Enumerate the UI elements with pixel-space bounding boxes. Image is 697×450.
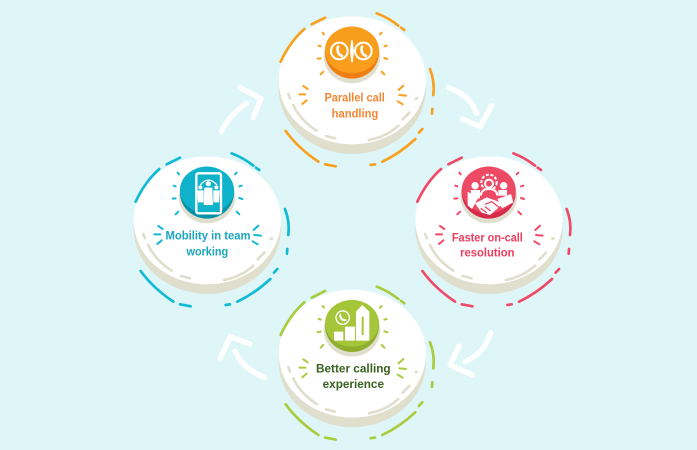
- disc: [279, 16, 426, 154]
- dashed ring: [136, 153, 289, 306]
- label: Better calling: [316, 362, 391, 376]
- arrow: parallel to faster: [448, 88, 492, 127]
- panel: mobility in team working: [134, 153, 289, 306]
- disc: [134, 156, 281, 294]
- icon: handshake and team button: [460, 167, 517, 223]
- label: Parallel call: [324, 91, 385, 105]
- panel: better calling experience: experience: [323, 377, 384, 391]
- arrow: mobility to parallel: [221, 88, 261, 132]
- dashed ring: [281, 13, 434, 166]
- dashed ring: [417, 153, 570, 306]
- sparks: [299, 33, 406, 104]
- dashed ring: [281, 287, 434, 440]
- sparks: [154, 173, 261, 244]
- panel: better calling experience: [279, 287, 434, 440]
- label: Mobility in team: [165, 229, 251, 243]
- panel: mobility in team working: working: [186, 244, 228, 258]
- label: Faster on-call: [452, 230, 523, 244]
- icon: bars and phone button: [324, 300, 380, 357]
- icon: team in phone button: [179, 167, 235, 223]
- sparks: [436, 173, 543, 244]
- panel: faster on-call resolution: [415, 153, 570, 306]
- panel: parallel call handling: handling: [332, 106, 378, 120]
- arrow: faster to better: [450, 333, 491, 375]
- icon: two phones button: [324, 27, 380, 83]
- arrow: better to mobility: [220, 337, 264, 377]
- panel: faster on-call resolution: resolution: [460, 246, 515, 260]
- panel: parallel call handling: [279, 13, 434, 166]
- sparks: [299, 306, 406, 378]
- disc: [279, 290, 426, 427]
- disc: [415, 156, 563, 294]
